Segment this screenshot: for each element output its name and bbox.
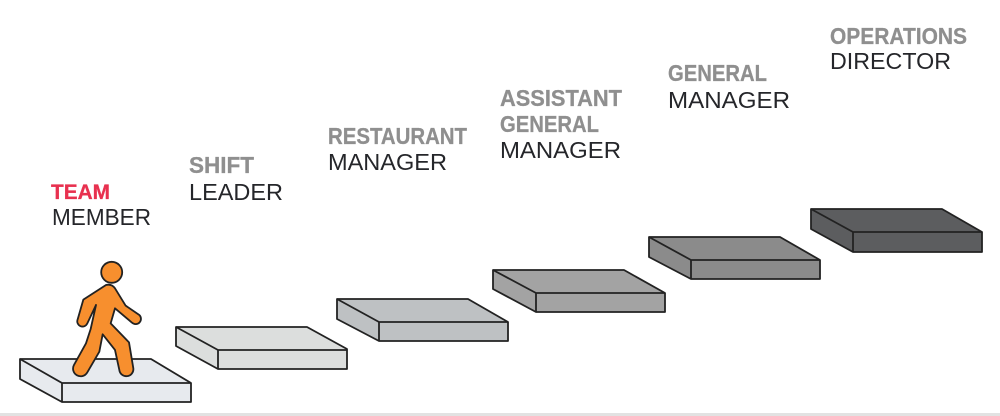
label: operations director: DIRECTOR bbox=[830, 48, 951, 74]
label: general manager: MANAGER bbox=[668, 87, 790, 113]
label: assistant general manager: ASSISTANT bbox=[500, 85, 622, 111]
icon: walking person bbox=[73, 262, 141, 376]
label: shift leader: SHIFT bbox=[189, 152, 254, 178]
label: general manager bbox=[668, 60, 790, 113]
step 1: team member bbox=[20, 359, 191, 402]
label: operations director bbox=[830, 23, 967, 74]
label: assistant general manager: MANAGER bbox=[500, 137, 621, 163]
label: restaurant manager: MANAGER bbox=[328, 149, 447, 175]
step 6: operations director bbox=[811, 209, 982, 252]
step 4: assistant general manager bbox=[493, 270, 665, 312]
label: operations director: OPERATIONS bbox=[830, 23, 967, 49]
label: general manager: GENERAL bbox=[668, 60, 767, 86]
label: team member bbox=[51, 180, 151, 230]
step 3: restaurant manager bbox=[337, 299, 508, 341]
label: assistant general manager: GENERAL bbox=[500, 111, 599, 137]
label: shift leader: LEADER bbox=[189, 179, 283, 205]
label: restaurant manager bbox=[328, 123, 467, 175]
label: team member: TEAM bbox=[51, 180, 110, 204]
step 5: general manager bbox=[649, 237, 820, 279]
label: team member: MEMBER bbox=[52, 204, 151, 230]
step 2: shift leader bbox=[176, 327, 347, 369]
label: restaurant manager: RESTAURANT bbox=[328, 123, 467, 149]
label: shift leader bbox=[189, 152, 283, 205]
label: assistant general manager bbox=[500, 85, 622, 163]
